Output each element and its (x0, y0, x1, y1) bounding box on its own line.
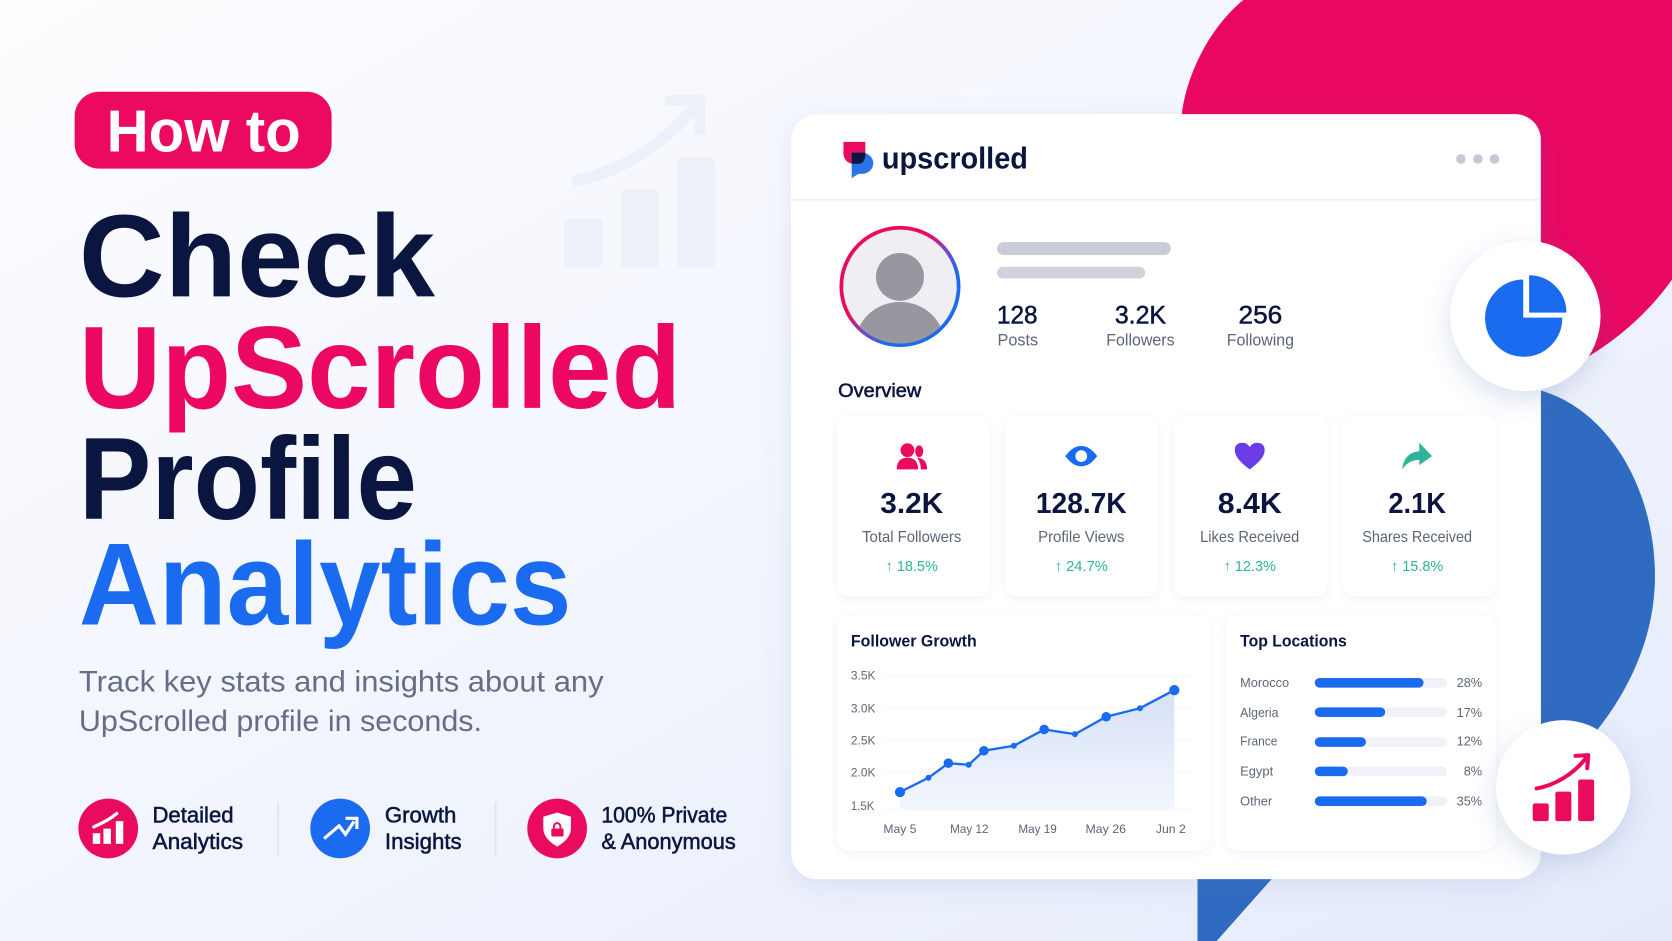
stat card: Total Followers (837, 416, 990, 596)
feature: Growth Insights (310, 799, 462, 858)
bar chart: locations: France (1240, 734, 1277, 749)
stat card: Profile Views: Profile Views (1038, 529, 1125, 546)
bar chart: locations: 17% (1457, 705, 1482, 720)
profile name placeholders (997, 242, 1171, 278)
panel: Follower Growth: Follower Growth (851, 632, 977, 651)
feature: 100% Private & Anonymous (527, 799, 736, 858)
panel: Top Locations (1225, 616, 1496, 850)
stat card: Likes Received (1174, 416, 1328, 596)
stat card: Total Followers: 3.2K (880, 488, 943, 520)
panel: Top Locations: Top Locations (1240, 632, 1347, 651)
line chart: 3.5K (851, 669, 876, 683)
title: Check (79, 191, 436, 322)
line chart (851, 669, 1194, 836)
stat card: Shares Received: 2.1K (1388, 488, 1446, 520)
panel: Follower Growth (837, 616, 1210, 850)
decorative pink blob (1181, 0, 1672, 368)
stat card: Total Followers: Total Followers (862, 529, 962, 546)
title: Analytics (79, 519, 572, 650)
line chart: 1.5K (851, 799, 875, 813)
feature: Detailed Analytics: Detailed (152, 803, 234, 828)
title (79, 191, 681, 650)
stat card: Likes Received: ↑ 12.3% (1224, 558, 1276, 575)
stat card: Profile Views: ↑ 24.7% (1055, 558, 1108, 575)
line chart: 2.5K (851, 734, 876, 748)
stat: Posts: 128 (997, 302, 1038, 329)
menu dots (1456, 154, 1499, 164)
line chart: 3.0K (851, 702, 876, 716)
panel: dashboard card (791, 114, 1541, 879)
floating badge: growth chart (1496, 720, 1630, 855)
title: Profile (79, 413, 417, 544)
stat card: Likes Received: Likes Received (1200, 529, 1299, 546)
subtitle: UpScrolled profile in seconds. (79, 705, 482, 738)
bar chart: locations: Morocco (1240, 675, 1289, 690)
bar chart: locations: Egypt (1240, 764, 1274, 779)
decorative blue half circle (1541, 390, 1655, 779)
icon: eye (1065, 446, 1097, 466)
floating badge: pie chart (1450, 241, 1601, 391)
avatar (839, 226, 960, 347)
stat card: Shares Received: ↑ 15.8% (1391, 558, 1443, 575)
stat: Following: 256 (1239, 302, 1282, 329)
stat card: Profile Views (1006, 416, 1158, 596)
ghost chart illustration (564, 100, 716, 268)
line chart: May 5 (883, 822, 917, 836)
feature: Growth Insights: Insights (385, 829, 462, 854)
feature: Detailed Analytics (78, 799, 243, 858)
bar chart: locations: 35% (1457, 794, 1482, 809)
subtitle: Track key stats and insights about any (79, 665, 604, 698)
logo: upscrolled: upscrolled (882, 142, 1028, 176)
bar chart: locations: Other (1240, 794, 1273, 809)
decorative blue triangle (1197, 875, 1275, 941)
stat card: Total Followers: ↑ 18.5% (886, 558, 938, 575)
feature: 100% Private & Anonymous: & Anonymous (601, 829, 736, 854)
badge: How to (75, 92, 332, 169)
icon: share arrow (1402, 443, 1432, 469)
bar chart: locations: 12% (1457, 734, 1482, 749)
line chart: May 26 (1086, 822, 1126, 836)
line chart: 2.0K (851, 766, 876, 780)
title: UpScrolled (79, 302, 681, 433)
stat: Following: Following (1227, 331, 1294, 350)
bar chart: locations: Algeria (1240, 705, 1279, 720)
bar chart: locations: 8% (1464, 764, 1482, 779)
line chart: May 12 (950, 822, 989, 836)
bar chart: locations (1240, 675, 1482, 809)
feature: Growth Insights: Growth (385, 803, 456, 828)
icon: heart (1235, 443, 1265, 469)
stat: Followers: 3.2K (1115, 302, 1167, 329)
icon: users (897, 443, 927, 469)
feature: Detailed Analytics: Analytics (152, 829, 243, 854)
line chart: May 19 (1018, 822, 1057, 836)
stat: Posts: Posts (998, 331, 1038, 350)
stat card: Shares Received: Shares Received (1362, 529, 1472, 546)
stat card: Likes Received: 8.4K (1218, 488, 1282, 520)
heading: Overview: Overview (838, 381, 921, 402)
stat card: Profile Views: 128.7K (1036, 488, 1127, 520)
stat card: Shares Received (1343, 416, 1496, 596)
stat: Followers (1106, 302, 1175, 350)
line chart: Jun 2 (1156, 822, 1186, 836)
subtitle (79, 665, 604, 738)
stat: Followers: Followers (1106, 331, 1175, 350)
badge: How to: How to (107, 97, 301, 165)
feature: 100% Private & Anonymous: 100% Private (601, 803, 727, 828)
bar chart: locations: 28% (1457, 675, 1482, 690)
stat: Following (1227, 302, 1294, 350)
stat: Posts (997, 302, 1038, 350)
